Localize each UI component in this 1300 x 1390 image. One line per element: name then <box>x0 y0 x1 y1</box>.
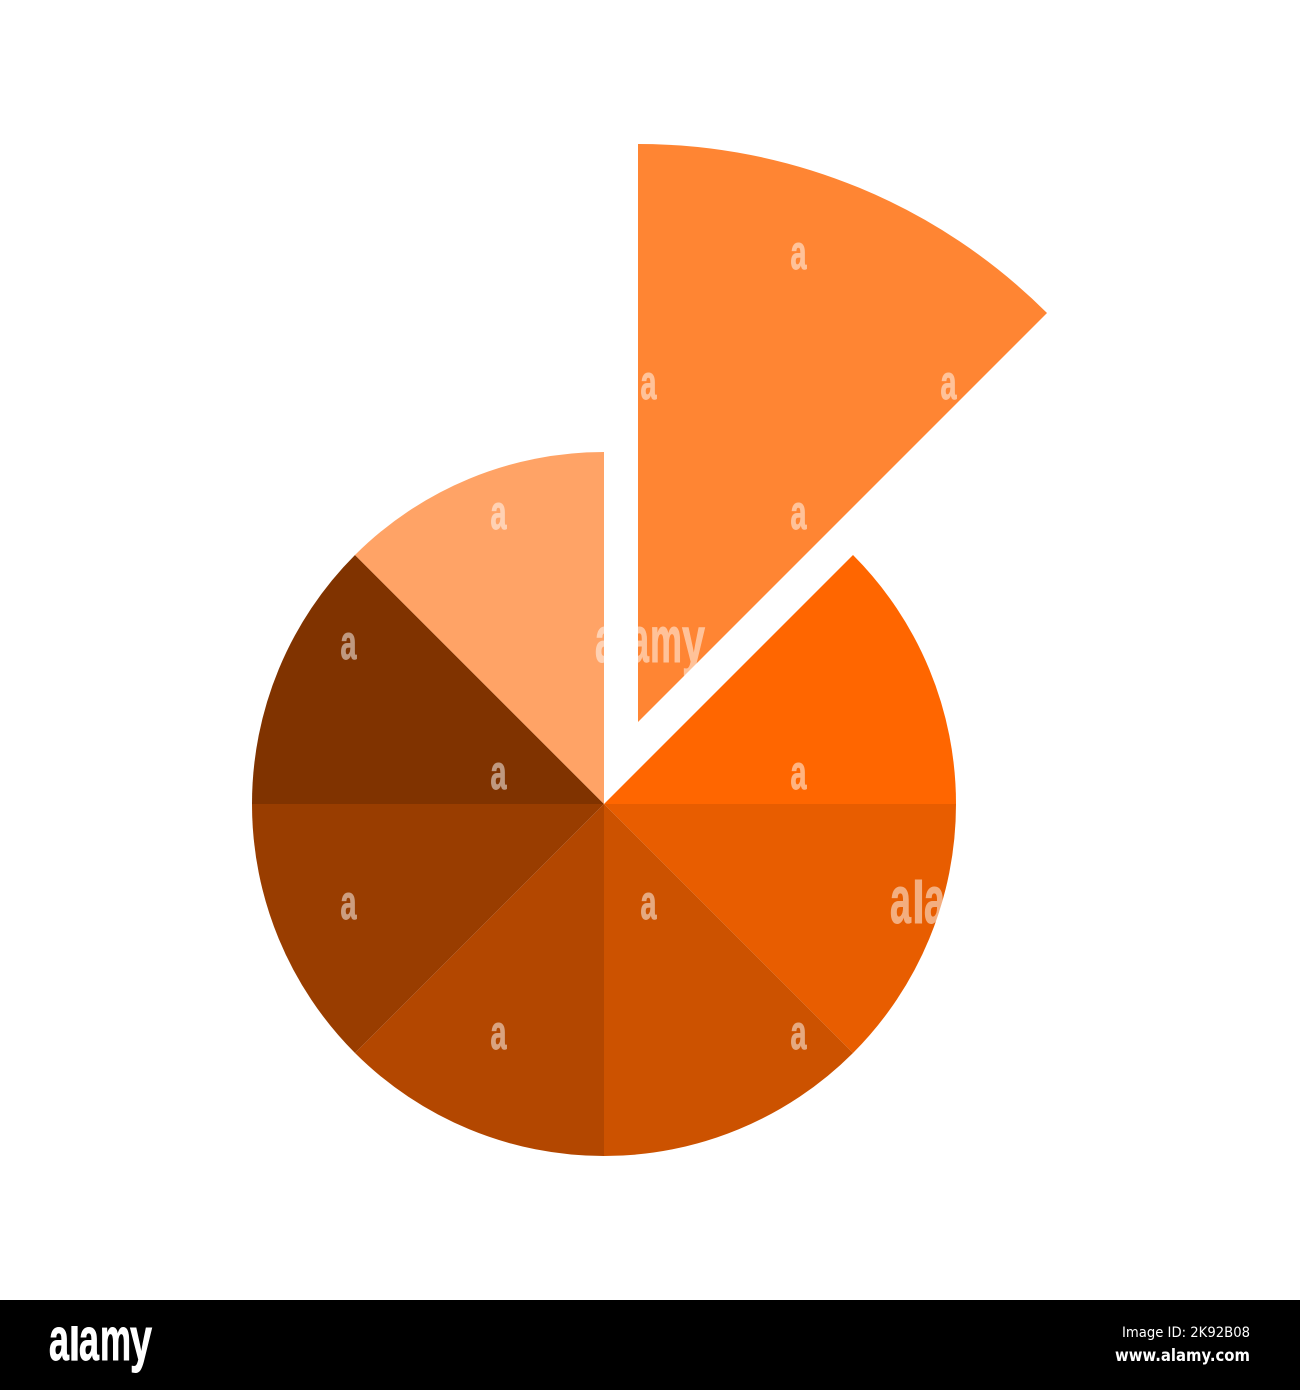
watermark pattern: a <box>790 487 807 540</box>
watermark pattern: a <box>640 357 657 410</box>
watermark pattern: a <box>630 603 649 676</box>
slice: top left <box>355 452 604 804</box>
watermark pattern: a <box>490 487 507 540</box>
website: www.alamy.com <box>1115 1346 1250 1366</box>
footer logo: y <box>130 1306 152 1373</box>
watermark pattern: l <box>912 870 925 936</box>
slice: lower right upper <box>604 804 956 1053</box>
image id: Image ID: 2K92B08 <box>1122 1325 1250 1341</box>
watermark pattern <box>340 227 1001 1060</box>
watermark pattern: y <box>682 603 705 676</box>
watermark pattern: a <box>640 877 657 930</box>
footer bar <box>0 1300 1300 1390</box>
watermark pattern: a <box>490 1007 507 1060</box>
watermark pattern: a <box>490 747 507 800</box>
footer logo: m <box>100 1306 131 1373</box>
pie chart <box>252 144 1047 1156</box>
footer logo: l <box>69 1318 80 1370</box>
watermark pattern: a <box>790 1007 807 1060</box>
watermark pattern: a <box>340 877 357 930</box>
watermark pattern: a <box>595 603 615 676</box>
watermark pattern: m <box>946 863 978 938</box>
watermark pattern: y <box>978 863 1001 938</box>
watermark pattern: l <box>616 612 629 674</box>
exploded slice <box>638 144 1047 722</box>
watermark pattern: a <box>790 747 807 800</box>
watermark pattern: a <box>890 863 911 938</box>
slice: bottom right <box>604 804 853 1156</box>
slice: upper left <box>252 555 604 804</box>
watermark pattern: a <box>924 863 945 938</box>
footer logo <box>49 1306 152 1373</box>
slice: upper right <box>604 555 956 804</box>
watermark pattern: a <box>340 617 357 670</box>
watermark pattern: a <box>940 357 957 410</box>
watermark pattern: m <box>650 603 682 676</box>
slice: bottom left <box>355 804 604 1156</box>
slice: lower left <box>252 804 604 1053</box>
watermark pattern: a <box>790 227 807 280</box>
footer logo: a <box>79 1306 99 1373</box>
footer logo: a <box>49 1306 69 1373</box>
